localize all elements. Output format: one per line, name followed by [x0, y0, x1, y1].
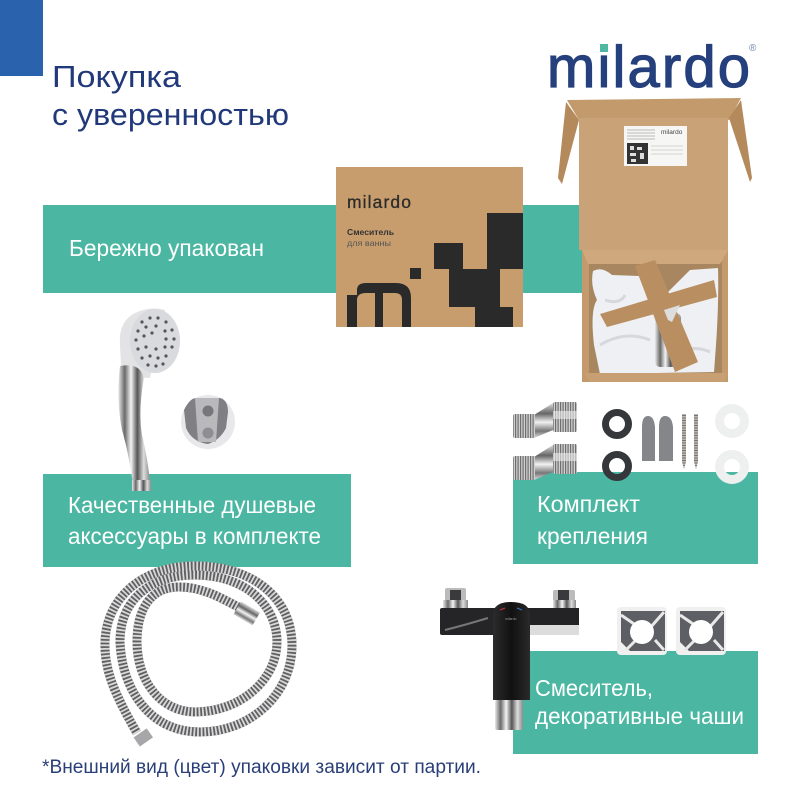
panel: mounting kit	[513, 472, 758, 564]
mounting fittings	[513, 402, 577, 480]
panel: mounting kit: крепления	[537, 523, 648, 549]
title	[52, 59, 289, 132]
mixer faucet: milardo	[505, 617, 517, 621]
panel: shower accessories: аксессуары в комплекте	[68, 523, 321, 549]
rubber rings	[606, 412, 628, 478]
QR label: milardo	[661, 129, 683, 136]
panel: carefully packed	[43, 205, 583, 293]
logo: milardo: milardo	[547, 35, 750, 100]
mixer faucet	[440, 588, 579, 730]
QR label	[624, 126, 687, 166]
logo: milardo: ®	[749, 43, 757, 54]
panel: faucet and escutcheons: декоративные чаши	[535, 703, 744, 729]
panel: mounting kit: Комплект	[537, 491, 640, 517]
wrapping paper	[592, 268, 718, 374]
footnote: *Внешний вид (цвет) упаковки зависит от партии.	[42, 757, 481, 778]
closed kraft box: milardo	[347, 192, 411, 212]
white washers	[720, 408, 744, 480]
corner accent block	[0, 0, 43, 76]
packed faucet	[655, 313, 681, 367]
shower head	[118, 309, 180, 491]
wall plugs	[642, 416, 673, 461]
title: Покупка	[52, 59, 182, 94]
closed kraft box	[336, 167, 523, 327]
panel: carefully packed: Бережно упакован	[69, 235, 264, 261]
closed kraft box: Смеситель	[347, 227, 394, 237]
title: с уверенностью	[52, 97, 289, 132]
shower hose	[105, 566, 292, 747]
screws	[682, 414, 698, 469]
panel: shower accessories: Качественные душевые	[68, 492, 316, 518]
panel: faucet and escutcheons: Смеситель,	[535, 675, 653, 701]
wall holder	[181, 395, 235, 449]
decorative escutcheons	[617, 607, 726, 655]
panel: shower accessories	[43, 474, 351, 567]
panel: faucet and escutcheons	[513, 651, 758, 754]
open kraft box with faucet	[558, 98, 752, 382]
closed kraft box: для ванны	[347, 238, 391, 248]
